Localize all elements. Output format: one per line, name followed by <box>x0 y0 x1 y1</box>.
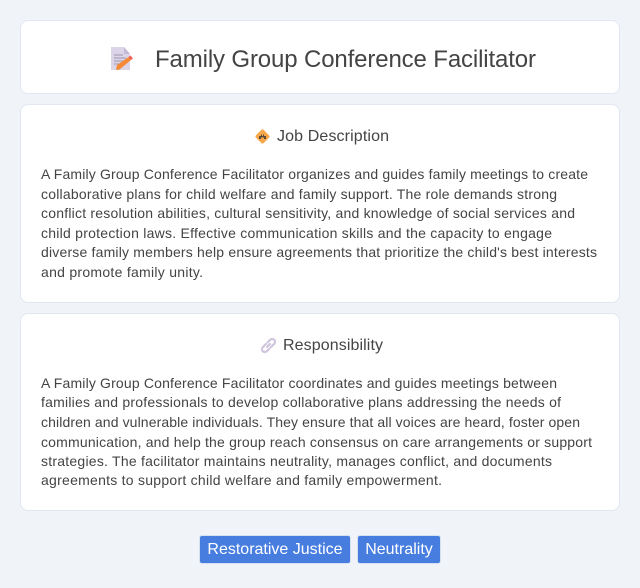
panel: title card <box>20 20 620 94</box>
text block: responsibility: communication, and help the group reach consensus on care arrangements or support <box>41 434 592 450</box>
title: Family Group Conference Facilitator <box>155 46 536 73</box>
tag: neutrality <box>357 535 441 564</box>
tag: neutrality: Neutrality <box>365 541 433 558</box>
text block: job description: collaborative plans for child welfare and family support. The role demands strong <box>41 186 557 202</box>
heading: job description: Job Description <box>277 128 389 145</box>
panel: responsibility <box>20 313 620 511</box>
text block: job description <box>41 166 597 280</box>
text block: responsibility: children and vulnerable individuals. They ensure that all voices are heard, foster open <box>41 414 580 430</box>
text block: responsibility: strategies. The facilitator maintains neutrality, manages conflict, and documents <box>41 453 552 469</box>
icon: document with pencil <box>111 47 133 70</box>
text block: responsibility: families and professionals to develop collaborative plans addressing the needs of <box>41 394 561 410</box>
text block: job description: diverse family members help ensure agreements that prioritize the child's best interests <box>41 244 597 260</box>
tag: restorative justice: Restorative Justice <box>207 541 343 558</box>
heading: responsibility: Responsibility <box>283 337 383 354</box>
text block: responsibility: A Family Group Conference Facilitator coordinates and guides meetings between <box>41 375 557 391</box>
icon: orange diamond <box>256 129 270 144</box>
text block: job description: child protection laws. Effective communication skills and the capacity to engage <box>41 225 552 241</box>
text block: responsibility: agreements to support child welfare and family empowerment. <box>41 472 442 488</box>
text block: job description: A Family Group Conference Facilitator organizes and guides family meetings to create <box>41 166 588 182</box>
icon: chain link <box>260 338 276 354</box>
tag: restorative justice <box>199 535 351 564</box>
panel: job description <box>20 104 620 303</box>
text block: job description: conflict resolution abilities, cultural sensitivity, and knowledge of social services and <box>41 205 575 221</box>
text block: job description: and promote family unity. <box>41 264 203 280</box>
text block: responsibility <box>41 375 592 488</box>
